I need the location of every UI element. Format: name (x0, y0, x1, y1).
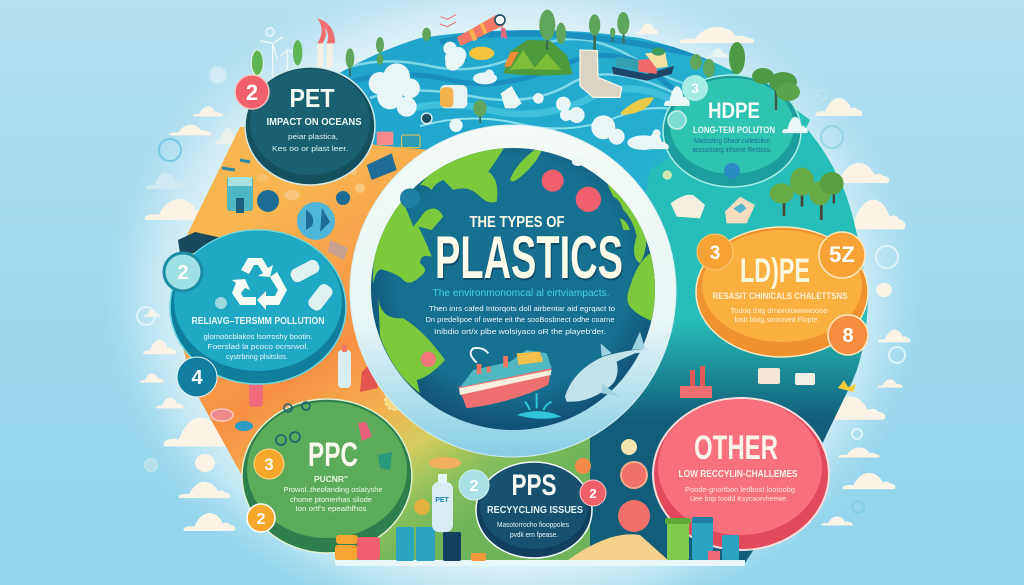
icon: orange container (471, 553, 486, 561)
number 2 pale (459, 470, 489, 500)
icon: sand blobs (257, 169, 365, 200)
panel: lower right objects (568, 439, 739, 560)
icon: distant cloud (635, 24, 658, 34)
number 3: 3 (710, 243, 720, 264)
subtitle: The environmonomcal al eirtviampacts. (432, 287, 610, 299)
number 8: 8 (842, 325, 854, 347)
icon: coral balls (575, 439, 650, 532)
body text: Inibdio ort/x plbe wolsiyaco oR the playeb'der. (434, 327, 606, 336)
badge face (250, 69, 370, 175)
icon: red buoys (400, 158, 601, 367)
badge base (663, 75, 801, 187)
badge face (702, 230, 862, 342)
number 3 (682, 75, 708, 101)
number 2 coral: 2 (589, 486, 597, 501)
text: Madosting Dhaor cutletiolion (694, 138, 770, 145)
icon: drink cup (222, 160, 253, 213)
icon: floating bag (501, 86, 522, 108)
icon: stacked discs (335, 535, 380, 560)
subheading: RESASIT CHINICALS CHALETTSNS (712, 291, 848, 301)
text (272, 132, 348, 153)
badge face (480, 463, 588, 549)
icon: small earth (257, 190, 279, 212)
panel: orange to green left field (176, 127, 620, 563)
icon: hilltop trees (690, 42, 800, 110)
number 2 pale: 2 (470, 478, 479, 495)
panel: bottom shelf items (335, 457, 745, 566)
heading: PPS (512, 469, 556, 502)
text (685, 487, 795, 503)
number 3 (697, 234, 733, 270)
icon: mid-right trees (770, 168, 844, 220)
icon: floating blocks (367, 132, 420, 180)
sky clouds (140, 24, 911, 531)
text: Todoq thtg drnorolowwwoooo (730, 308, 828, 315)
body text: Then inrs cafed Intorqots doll airbentar aid egrqact to (429, 304, 615, 313)
body text (426, 304, 615, 336)
number 5Z (819, 232, 865, 278)
text: Foerslad la pcoco ocrsrwol. (208, 344, 309, 351)
subheading: LONG-TEM POLUTON (693, 125, 775, 135)
icon: striped box (328, 240, 348, 260)
icon: birds (440, 15, 456, 27)
icon: big foam (369, 48, 465, 117)
icon: trees (251, 28, 431, 77)
panel: central globe ring (350, 125, 676, 457)
icon: blue orb (724, 163, 740, 179)
panel: PPC (242, 399, 412, 553)
number 2 coral (580, 480, 606, 506)
number 3 (254, 449, 284, 479)
text: chome ptomerhas silode (290, 497, 372, 504)
icon: plastic pipe (457, 15, 507, 46)
text (730, 308, 828, 324)
icon: factory and transport (680, 366, 856, 398)
icon: concrete dam (580, 50, 622, 97)
icon: cargo ship (612, 48, 674, 81)
text: Uee bop toodd Ksycaorvheewe. (690, 496, 788, 503)
panel: teal right field (600, 90, 868, 442)
icon: pink and green items (358, 422, 392, 470)
panel: left top scenery (251, 18, 465, 180)
small marker (668, 111, 686, 129)
icon: small canister (722, 535, 739, 560)
badge face (670, 78, 794, 174)
icon: water splash (517, 393, 562, 419)
icon: dark bin (443, 532, 461, 561)
number 8 (828, 315, 868, 355)
icon: beach ball (414, 499, 430, 515)
icon: colored cups (708, 551, 720, 560)
text (692, 138, 772, 154)
number 2 (164, 253, 202, 291)
icon: machine (178, 232, 222, 254)
icon: whale (565, 332, 652, 402)
subheading: IMPACT ON OCEANS (266, 117, 362, 128)
icon: plastic bottle (338, 345, 351, 388)
text (497, 522, 569, 539)
badge face (658, 399, 822, 535)
icon: teal bin (692, 517, 713, 560)
badge base (170, 230, 346, 384)
text (284, 487, 383, 513)
panel: dark teal lower right field (590, 420, 833, 563)
icon: floating boats (663, 170, 755, 223)
text (204, 334, 313, 361)
icon: sand mound (568, 534, 668, 560)
icon: PET bottle (432, 474, 453, 532)
icon: PET bottle: PET (435, 497, 450, 504)
text: pvdk ern fpease. (510, 532, 558, 539)
icon: gear (385, 390, 405, 410)
icon: floating bottle (440, 85, 467, 108)
heading: HDPE (708, 98, 760, 123)
number 5Z: 5Z (829, 242, 855, 267)
shelf (335, 560, 745, 566)
heading: PET (290, 83, 335, 113)
badge base (242, 399, 412, 553)
number 2: 2 (246, 80, 258, 105)
number 3: 3 (691, 80, 699, 96)
panel: ocean foreground scenery (440, 10, 674, 150)
icon: sand stack (429, 457, 461, 469)
number 2: 2 (257, 511, 266, 528)
subheading: LOW RECCYLIN-CHALLEMES (678, 469, 798, 480)
panel: OTHER (653, 398, 829, 550)
icon: yellow float (469, 47, 494, 60)
icon: blue barrels (396, 527, 435, 561)
icon: pink stack (249, 375, 263, 407)
icon: red toy (360, 362, 378, 392)
number 2 (247, 504, 275, 532)
text: Masotorrocho fiooppoles (497, 522, 569, 529)
badge base (653, 398, 829, 550)
floating bubbles (137, 28, 905, 513)
text: arzoastsing inhorne Restocs. (692, 147, 772, 154)
icon: ship (458, 348, 552, 408)
badge face (174, 231, 342, 371)
icon: recycle (232, 258, 287, 310)
body text: Dn predelipoe of owete eit the sooBosbnect odhe coarne (426, 315, 614, 324)
ocean waves (346, 30, 708, 130)
icon: chimneys (317, 18, 335, 67)
icon: foam (443, 42, 661, 150)
panel: ocean backdrop (300, 30, 810, 300)
icon: island (503, 10, 573, 76)
text: bistt btvig simroved Flopte. (734, 317, 820, 324)
badge base (696, 227, 868, 357)
icon: large earth (297, 202, 335, 240)
heading: THE TYPES OF (470, 214, 565, 231)
subheading: RELIAVG–TERSMM POLLUTION (192, 316, 324, 327)
panel: HDPE (641, 75, 808, 187)
panel: PPS (459, 462, 606, 558)
number 2: 2 (177, 262, 189, 284)
icon: teal lens (421, 113, 432, 124)
text: Prowol..theofanding oslatyshe (284, 487, 383, 494)
subheading: RECYYCLING ISSUES (487, 505, 583, 516)
badge base (476, 462, 592, 558)
icon: green bin (665, 518, 691, 560)
heading: LD)PE (740, 252, 810, 290)
panel: teal recycling (164, 230, 346, 397)
text: Kes oo or plast leer. (272, 144, 348, 153)
subheading: PUCNR'' (314, 475, 348, 484)
badge base (245, 67, 375, 185)
text: peiar plastica, (288, 132, 338, 141)
heading: OTHER (694, 429, 778, 467)
globe sea (371, 148, 655, 430)
ring (350, 125, 676, 457)
heading: PPC (308, 436, 358, 474)
icon: small bubble (215, 297, 227, 309)
title: PLASTICS (435, 224, 623, 291)
panel: items on orange field (178, 160, 405, 431)
text: glomoöcblakos lsorroshy bootin. (204, 334, 313, 341)
badge face (247, 402, 407, 538)
number 4: 4 (191, 367, 203, 389)
icon: sea tree (473, 100, 487, 123)
icon: blue stone (235, 421, 253, 431)
icon: bicycles (276, 402, 310, 445)
text: cystrbring plsitslos. (226, 354, 288, 361)
icon: far trees (589, 12, 629, 50)
globe detail (373, 142, 670, 393)
number 4 (177, 357, 217, 397)
panel: LDPE (696, 227, 868, 357)
text: ton ortf's epeathfhos (296, 506, 367, 513)
icon: plastic bottles (288, 258, 335, 313)
icon: foam cloud (641, 86, 808, 149)
icon: wind turbines (260, 37, 300, 77)
icon: mini earth (336, 191, 350, 205)
panel: PET (235, 67, 375, 185)
icon: yellow boat (620, 97, 654, 115)
number 3: 3 (264, 455, 274, 474)
icon: disc (211, 409, 233, 421)
text: Poode-gnortbon ledbost lootoobg (685, 487, 795, 494)
